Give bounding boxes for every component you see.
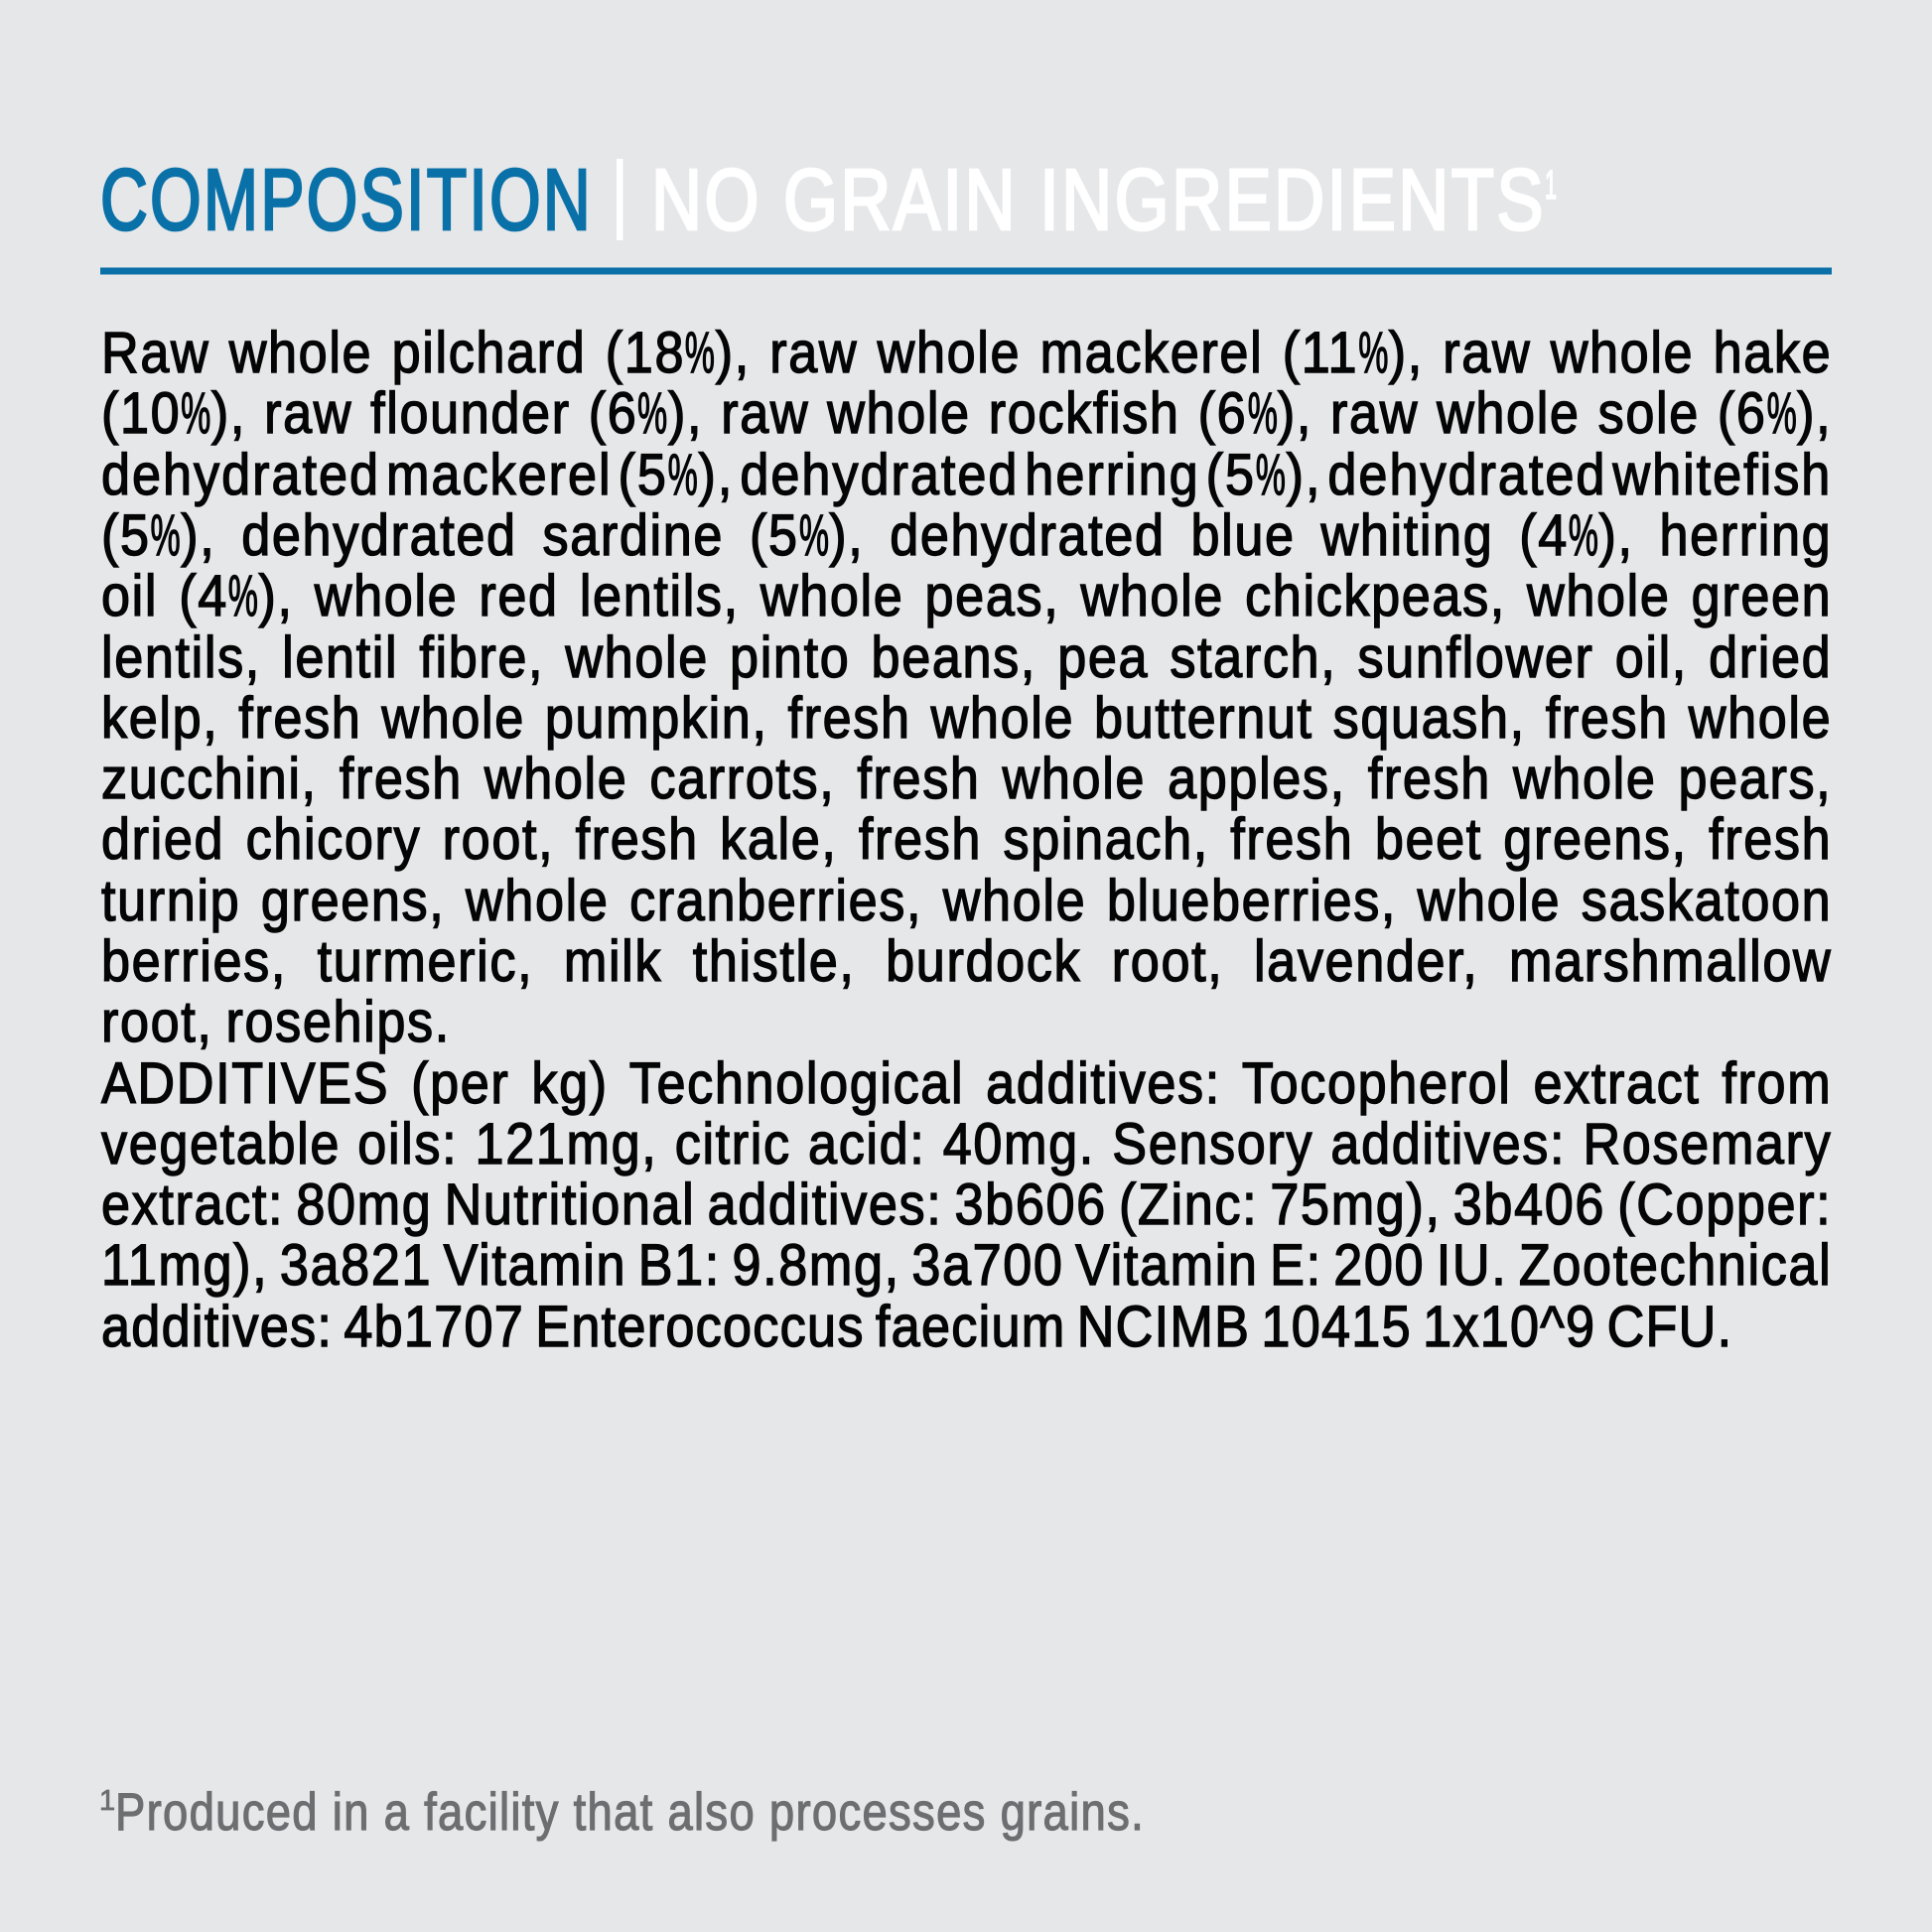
additives text block: ADDITIVES (per kg) Technological additives: Tocopherol extract from (101, 1051, 1832, 1116)
heading: composition: COMPOSITION (100, 152, 593, 248)
ingredients text block: % (228, 564, 259, 628)
ingredients text block: lentils, lentil fibre, whole pinto beans, pea starch, sunflower oil, dried (101, 625, 1832, 689)
additives text block: 11mg), 3a821 Vitamin B1: 9.8mg, 3a700 Vitamin E: 200 IU. Zootechnical (101, 1233, 1832, 1298)
ingredients text block: % (1358, 321, 1389, 385)
additives text block: extract: 80mg Nutritional additives: 3b606 (Zinc: 75mg), 3b406 (Copper: (101, 1173, 1832, 1237)
ingredients text block: kelp, fresh whole pumpkin, fresh whole butternut squash, fresh whole (101, 686, 1832, 751)
footnote: 1 (99, 1785, 115, 1817)
ingredients text block: % (799, 503, 830, 568)
ingredients text block: dehydrated mackerel (5 ), dehydrated herring (5 ), dehydrated whitefish (101, 443, 1832, 507)
heading superscript: 1 (1545, 162, 1557, 207)
additives text block: vegetable oils: 121mg, citric acid: 40mg. Sensory additives: Rosemary (101, 1112, 1832, 1176)
ingredients text block: % (1569, 503, 1599, 568)
heading: no grain ingredients: NO GRAIN INGREDIENTS (651, 152, 1546, 248)
ingredients text block: oil (4 ), whole red lentils, whole peas, whole chickpeas, whole green (101, 564, 1832, 628)
additives text block (100, 1051, 1832, 1359)
ingredients text block: % (1256, 443, 1287, 507)
ingredients text block: (10 ), raw flounder (6 ), raw whole rockfish (6 ), raw whole sole (6 ), (101, 381, 1832, 446)
ingredients text block: root, rosehips. (101, 990, 451, 1054)
ingredients text block (101, 321, 1832, 1054)
ingredients text block: berries, turmeric, milk thistle, burdock root, lavender, marshmallow (101, 929, 1832, 994)
ingredients text block: % (637, 381, 669, 446)
ingredients text block: zucchini, fresh whole carrots, fresh whole apples, fresh whole pears, (101, 747, 1832, 811)
ingredients text block: % (1247, 381, 1279, 446)
ingredients text block: % (685, 321, 716, 385)
footnote: Produced in a facility that also processes grains. (115, 1783, 1145, 1842)
ingredients text block: % (1767, 381, 1798, 446)
ingredients text block: % (668, 443, 699, 507)
ingredients text block: (5 ), dehydrated sardine (5 ), dehydrated blue whiting (4 ), herring (101, 503, 1832, 568)
ingredients text block: Raw whole pilchard (18 ), raw whole mackerel (11 ), raw whole hake (101, 321, 1832, 385)
ingredients text block: % (151, 503, 182, 568)
heading rule (100, 268, 1832, 274)
ingredients text block: turnip greens, whole cranberries, whole blueberries, whole saskatoon (101, 869, 1832, 933)
ingredients text block: % (181, 381, 212, 446)
ingredients text block: dried chicory root, fresh kale, fresh spinach, fresh beet greens, fresh (101, 807, 1832, 872)
additives text block: additives: 4b1707 Enterococcus faecium NCIMB 10415 1x10^9 CFU. (101, 1295, 1732, 1359)
heading separator bar (617, 159, 623, 240)
